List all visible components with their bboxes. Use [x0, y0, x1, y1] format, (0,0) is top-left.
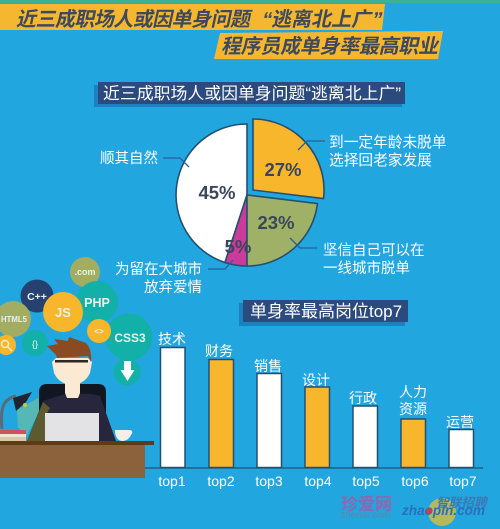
pie annotation: return home: 选择回老家发展: [329, 152, 432, 169]
pie annotation: go with the flow: 顺其自然: [100, 150, 158, 167]
bar: top7 operations: 运营: [446, 414, 474, 430]
glasses: [55, 360, 88, 362]
pie slice: return home 27%: [253, 119, 324, 199]
pie percentage labels: 23%: [257, 212, 295, 233]
bar: top2 finance: top2: [207, 473, 235, 489]
books: [0, 430, 26, 441]
bar: top3 sales: [254, 358, 283, 489]
watermark: zhaopin: zhaopin.com: [401, 502, 485, 518]
bar: top4 design: 设计: [302, 372, 330, 388]
title banner: line one: 近三成职场人或因单身问题: [15, 7, 254, 31]
bubble: braces: {}: [32, 339, 38, 350]
pie annotation: give up love: 为留在大城市: [115, 261, 202, 278]
bar: top1 tech: 技术: [158, 331, 186, 347]
watermark: zhenai: zhenai.com: [340, 510, 391, 521]
bubble: .com: .com: [74, 267, 96, 277]
desk lamp: [1, 392, 44, 437]
bubble: .com: [70, 257, 100, 287]
bubble: search: [0, 335, 16, 355]
bar: top6 HR: top6: [401, 473, 429, 489]
bubble: code: <>: [94, 327, 104, 336]
bubble: code: [87, 319, 111, 343]
watermark: zhaopin: 智联招聘: [436, 496, 489, 510]
bar: top5 admin: [349, 390, 380, 489]
bar: top5 admin: top5: [352, 473, 380, 489]
bar: top2 finance: 财务: [205, 343, 233, 359]
bubble: download arrow: [114, 358, 140, 386]
pie percentage labels: 27%: [264, 159, 302, 180]
watermark: zhenai: 珍爱网: [341, 494, 392, 514]
bubble: JS: JS: [55, 305, 71, 320]
desk: [0, 441, 154, 445]
bubble: C++: C++: [27, 291, 47, 303]
pie annotation: stay in big city: 坚信自己可以在: [323, 242, 424, 259]
bubble: PHP: [76, 281, 118, 323]
pie chart: [176, 119, 324, 266]
bar chart: [145, 331, 483, 489]
bar: top7 operations: top7: [449, 473, 477, 489]
pie percentage labels: [198, 159, 302, 257]
bar: top4 design: [302, 372, 332, 489]
pie annotation: return home: 到一定年龄未脱单: [329, 134, 447, 151]
title banner: line one: “逃离北上广”: [260, 7, 385, 31]
tech bubbles: [0, 257, 152, 386]
bubble: PHP: PHP: [84, 296, 110, 310]
pie chart heading: [94, 82, 405, 107]
bubble: CSS3: CSS3: [114, 331, 146, 345]
bar: top7 operations: [446, 414, 477, 489]
watermark: zhaopin: [401, 496, 489, 526]
bubble: HTML5: HTML5: [1, 315, 28, 324]
pie annotation: stay in big city: 一线城市脱单: [323, 260, 410, 277]
chair: [39, 384, 106, 420]
pie percentage labels: 5%: [225, 236, 251, 257]
pie percentage labels: 45%: [198, 182, 236, 203]
hair: [47, 337, 91, 362]
bar: top3 sales: 销售: [254, 358, 282, 374]
bar: top5 admin: 行政: [349, 390, 377, 406]
title banner: line one: [0, 4, 385, 31]
pie chart heading: 近三成职场人或因单身问题“逃离北上广”: [103, 84, 401, 103]
pie slice: give up love 5%: [225, 195, 247, 266]
bubble: JS: [43, 292, 83, 332]
bubble: C++: [20, 280, 54, 312]
illustration: programmer at desk: [0, 337, 154, 478]
bar: top6 HR: 人力: [399, 384, 427, 400]
pie annotation: give up love: 放弃爱情: [144, 279, 202, 296]
pie slice: stay naturally 45%: [176, 124, 247, 262]
bar chart heading: 单身率最高岗位top7: [250, 302, 402, 321]
jacket sleeve: [27, 402, 50, 441]
bar: top1 tech: [158, 331, 186, 489]
pie annotation: give up love: [115, 261, 202, 296]
bar: top2 finance: [205, 343, 235, 489]
pie annotation: return home: [329, 134, 447, 169]
torso: [27, 394, 116, 441]
bar: top1 tech: top1: [158, 473, 186, 489]
neck and collar: [65, 378, 80, 398]
bar: top6 HR: 资源: [399, 401, 427, 417]
head: [52, 358, 92, 385]
coffee cup: [115, 430, 132, 441]
laptop: [45, 413, 99, 441]
bar: top6 HR: [399, 384, 429, 489]
bubble: HTML5: [0, 301, 31, 337]
pie annotation: stay in big city: [323, 242, 424, 277]
bubble: braces: [22, 330, 48, 356]
pie slice: stay and find partner 23%: [247, 195, 318, 266]
pie leader lines: [163, 141, 325, 269]
title banner: line two: 程序员成单身率最高职业: [220, 34, 442, 58]
watermark: zhenai: [340, 494, 392, 521]
bubble: CSS3: [106, 314, 152, 360]
bar chart heading: [239, 300, 408, 326]
bar: top4 design: top4: [304, 473, 332, 489]
bar: top3 sales: top3: [255, 473, 283, 489]
